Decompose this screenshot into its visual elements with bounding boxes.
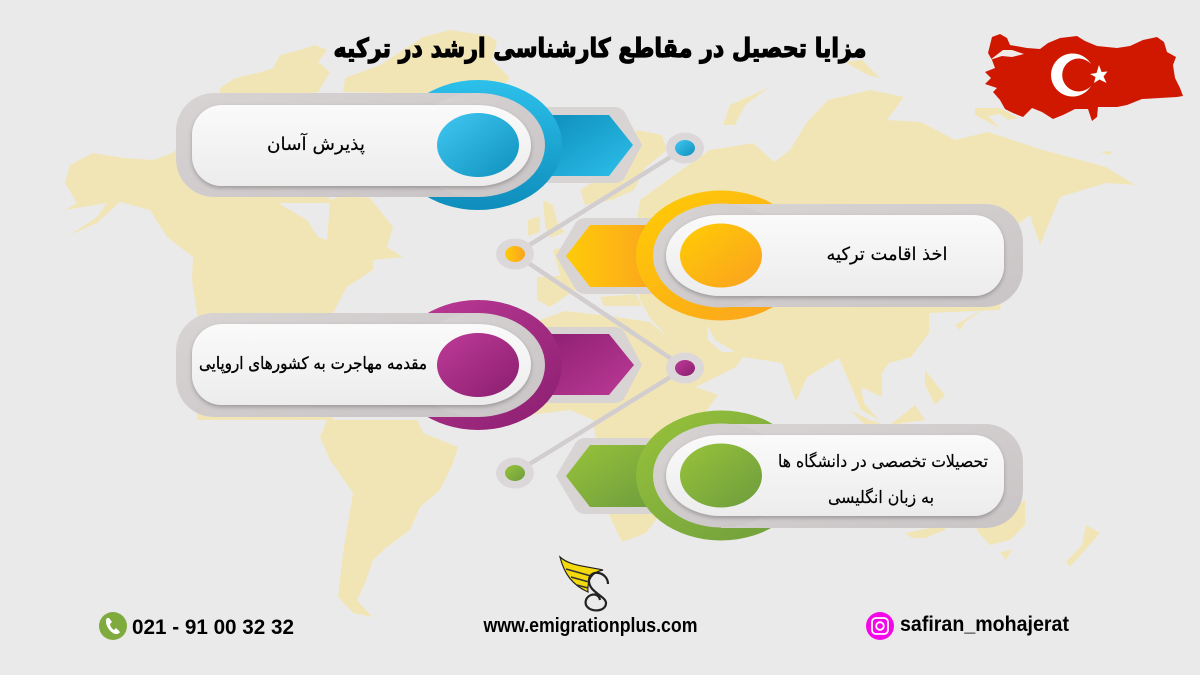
panel: English-language programmes xyxy=(556,410,1023,540)
Canadian arctic islands xyxy=(220,45,330,110)
world map xyxy=(65,30,1135,617)
Africa xyxy=(530,311,718,542)
inner disc xyxy=(437,113,519,177)
colored ring xyxy=(636,190,806,320)
Indonesia xyxy=(850,370,945,425)
inland seas xyxy=(278,92,735,352)
white pill xyxy=(666,435,1004,516)
white pill xyxy=(666,215,1004,296)
Aegean islands xyxy=(975,108,1018,128)
colored ring xyxy=(394,80,562,210)
gray backing xyxy=(721,424,1023,528)
arrow tab xyxy=(556,218,660,294)
gray backing xyxy=(721,204,1023,307)
node: green xyxy=(496,458,534,488)
colored ring xyxy=(394,300,562,430)
inner disc xyxy=(680,444,762,508)
icon: instagram xyxy=(866,612,894,640)
star xyxy=(1090,65,1108,83)
label line 1: تحصیلات تخصصی در دانشگاه ها xyxy=(778,451,988,472)
title: مزایا تحصیل در مقاطع کارشناسی ارشد در ترکیه xyxy=(334,34,866,64)
Turkey shape xyxy=(985,34,1183,121)
website: www.emigrationplus.com xyxy=(483,615,698,637)
swan S xyxy=(586,573,608,610)
Greenland xyxy=(343,30,510,95)
South America xyxy=(320,420,458,617)
panel: easy admission xyxy=(176,80,642,210)
label line 2: به زبان انگلیسی xyxy=(828,487,934,508)
inner disc xyxy=(437,333,519,397)
New Zealand xyxy=(1066,525,1100,567)
Ireland xyxy=(528,216,540,236)
Japan xyxy=(955,308,985,330)
wing feather lines xyxy=(566,569,591,588)
Scandinavia xyxy=(580,130,667,205)
panel: gateway to Europe xyxy=(176,300,642,430)
Southern Europe xyxy=(600,294,642,306)
connector lines xyxy=(515,148,685,473)
gray backing xyxy=(176,93,478,197)
North America xyxy=(65,120,403,420)
white pill xyxy=(192,324,531,405)
phone number: 021 - 91 00 32 32 xyxy=(132,616,294,639)
label: مقدمه مهاجرت به کشورهای اروپایی xyxy=(199,354,427,374)
label: اخذ اقامت ترکیه xyxy=(826,244,948,265)
arrow tab xyxy=(540,327,642,403)
logo xyxy=(560,557,608,610)
crescent xyxy=(1051,54,1091,96)
Australia xyxy=(905,500,1025,545)
Wrangel island xyxy=(1100,151,1112,155)
Arctic island xyxy=(845,60,880,78)
Sea of Marmara xyxy=(990,50,1024,60)
arrow tab xyxy=(556,438,660,514)
white pill xyxy=(192,105,531,186)
node: orange xyxy=(496,238,534,270)
instagram handle: safiran_mohajerat xyxy=(900,613,1069,636)
Tasmania xyxy=(1000,550,1012,560)
node: purple xyxy=(666,352,704,384)
colored ring xyxy=(636,410,806,540)
Asia xyxy=(632,90,1135,420)
label: پذیرش آسان xyxy=(267,132,365,155)
gray backing xyxy=(176,313,478,417)
node: blue xyxy=(666,132,704,164)
map of Turkey with flag xyxy=(975,34,1183,128)
Novaya Zemlya xyxy=(723,87,770,125)
arrow tab xyxy=(540,107,642,183)
Iberia xyxy=(537,275,575,307)
panel: Turkish residency xyxy=(556,190,1023,320)
United Kingdom xyxy=(543,200,565,238)
wing xyxy=(560,557,603,592)
inner disc xyxy=(680,224,762,288)
Western Europe xyxy=(553,245,575,280)
icon: phone xyxy=(99,612,127,640)
